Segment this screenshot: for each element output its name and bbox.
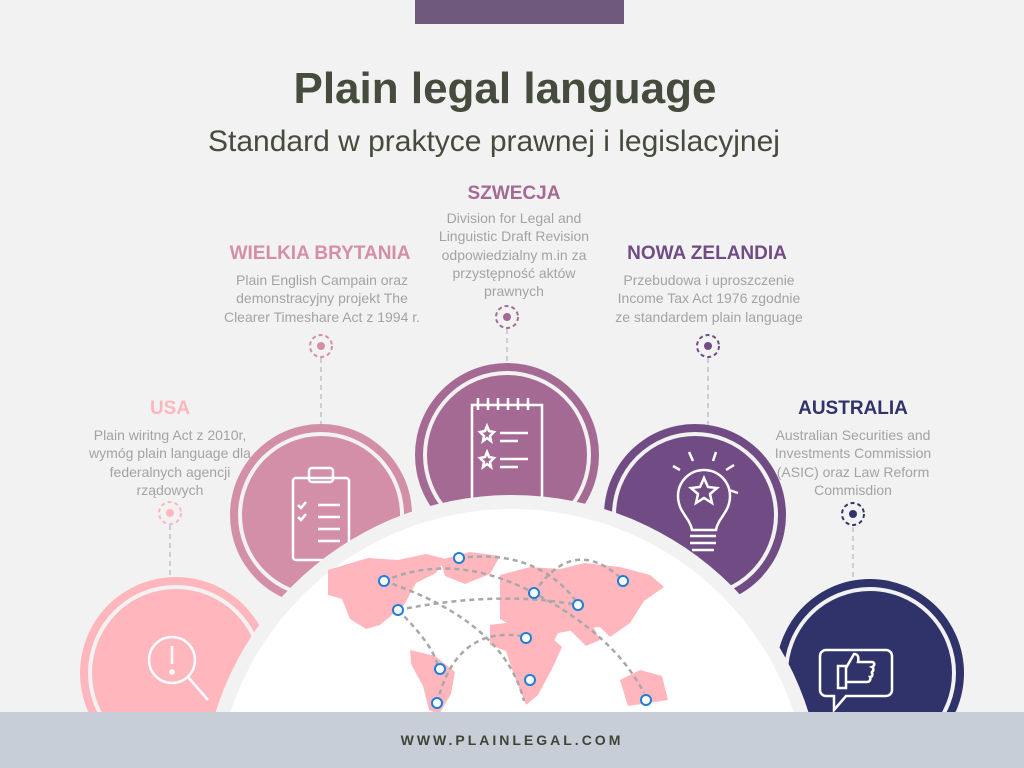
heading: SZWECJA: SZWECJA xyxy=(468,183,560,204)
text: Sweden: prawnych xyxy=(484,283,544,299)
heading: WIELKA BRYTANIA: WIELKIA BRYTANIA xyxy=(230,243,410,264)
footer xyxy=(0,712,1024,768)
text: USA: rządowych xyxy=(137,482,203,498)
text: USA: federalnych agencji xyxy=(110,464,230,480)
text: UK: Clearer Timeshare Act z 1994 r. xyxy=(224,309,420,325)
text: NZ: ze standardem plain language xyxy=(615,309,803,325)
subtitle: Standard w praktyce prawnej i legislacyjnej xyxy=(208,125,780,158)
text: UK xyxy=(224,272,420,325)
text: NZ: Income Tax Act 1976 zgodnie xyxy=(618,290,800,306)
globe dome xyxy=(201,495,823,768)
text: Australia: Investments Commission xyxy=(775,445,931,461)
dot markers xyxy=(159,306,864,525)
location dots xyxy=(379,553,651,708)
text: Sweden xyxy=(439,210,589,299)
heading: NOWA ZELANDIA: NOWA ZELANDIA xyxy=(627,243,787,264)
text: Australia: (ASIC) oraz Law Reform xyxy=(777,464,929,480)
text: UK: Plain English Campain oraz xyxy=(236,272,408,288)
heading: AUSTRALIA: AUSTRALIA xyxy=(798,398,908,419)
circle: New Zealand xyxy=(604,424,786,606)
circle: UK xyxy=(230,424,412,606)
footer url: WWW.PLAINLEGAL.COM xyxy=(401,732,623,748)
top bar xyxy=(415,0,624,24)
text: USA: Plain wiritng Act z 2010r, xyxy=(94,427,246,443)
text: NZ: Przebudowa i uproszczenie xyxy=(623,272,795,288)
circle: Sweden xyxy=(415,363,599,547)
text: Sweden: Division for Legal and xyxy=(447,210,581,226)
text: Australia xyxy=(775,427,931,498)
text: Australia: Australian Securities and xyxy=(776,427,930,443)
connector stems xyxy=(170,329,853,578)
text: UK: demonstracyjny projekt The xyxy=(236,290,408,306)
text: NZ xyxy=(615,272,803,325)
route lines xyxy=(384,557,644,703)
circle: USA xyxy=(80,577,272,768)
title: Plain legal language xyxy=(293,64,716,113)
text: Australia: Commisdion xyxy=(814,482,892,498)
world map xyxy=(328,552,668,714)
text: Sweden: Linguistic Draft Revision xyxy=(439,228,589,244)
text: USA: wymóg plain language dla xyxy=(89,445,251,461)
text: USA xyxy=(89,427,251,498)
circle: Australia xyxy=(776,579,964,767)
heading: USA: USA xyxy=(150,398,190,419)
text: Sweden: przystępność aktów xyxy=(453,265,575,281)
text: Sweden: odpowiedzialny m.in za xyxy=(442,247,586,263)
